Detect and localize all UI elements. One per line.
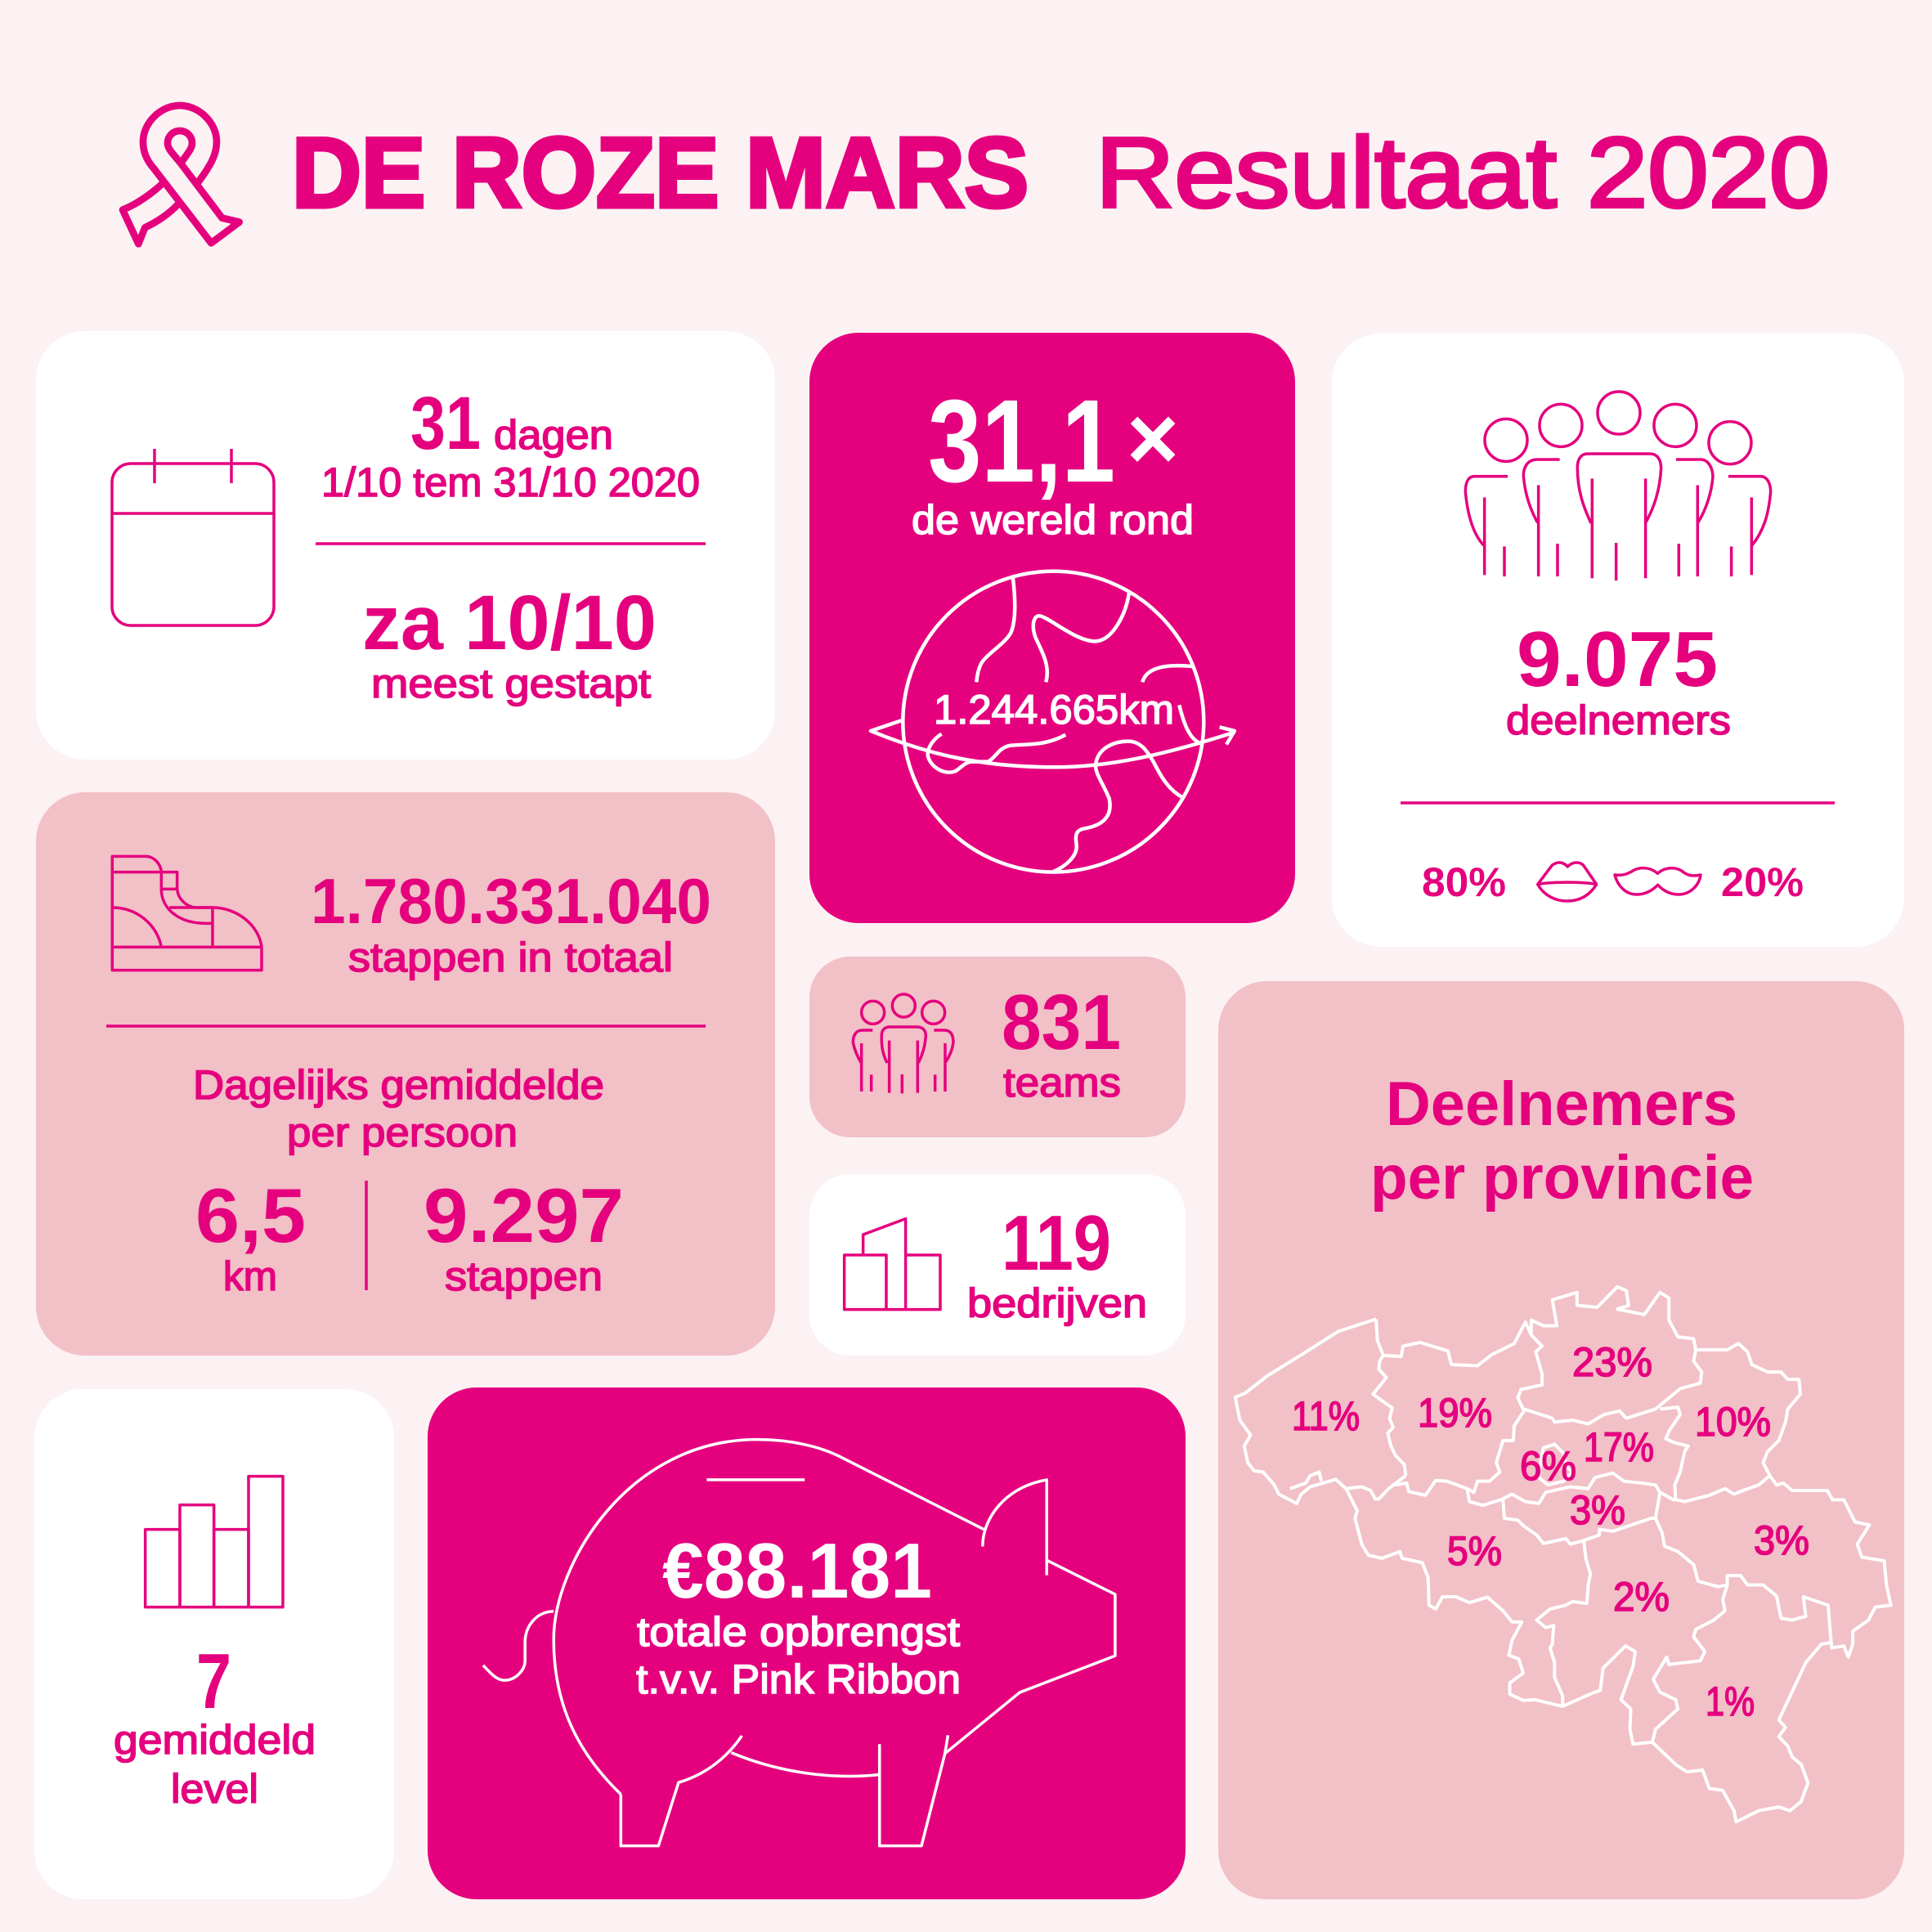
icon: people [1465, 392, 1771, 580]
text: caption: totale opbrengst [637, 1609, 960, 1655]
panel: provincies [1218, 981, 1904, 1899]
panel: wereld rond [809, 333, 1295, 923]
map labels: 5% [1447, 1528, 1502, 1574]
panel: deelnemers [1332, 334, 1904, 947]
panel: bedrijven [809, 1174, 1186, 1356]
panel: opbrengst: t.v.v. Pink Ribbon [636, 1656, 961, 1702]
heading: per provincie [1370, 1143, 1754, 1213]
text: amount: €88.181 [662, 1527, 932, 1615]
map labels: 3% [1570, 1487, 1625, 1533]
panel: stappen: stappen [445, 1253, 603, 1299]
text: daily average heading: Dagelijks gemiddelde [193, 1062, 604, 1108]
text: period: 1/10 tem 31/10 2020 [321, 459, 700, 505]
heading [1370, 1069, 1754, 1213]
map labels: 10% [1695, 1399, 1771, 1445]
panel: bedrijven: bedrijven [967, 1280, 1147, 1326]
map labels: 17% [1584, 1424, 1654, 1470]
map labels: 3% [1754, 1517, 1809, 1563]
text: deelnemers: deelnemers [1506, 697, 1731, 743]
icon: globe [871, 572, 1235, 872]
map labels: 1% [1706, 1679, 1755, 1724]
title: DE ROZE MARS [292, 117, 1029, 228]
map labels: 11% [1292, 1393, 1360, 1439]
panel: level: gemiddeld [114, 1717, 316, 1763]
icon: bar chart [146, 1477, 283, 1607]
text: 31,1x: 31,1 [928, 375, 1115, 507]
panel: stappen: per persoon [287, 1109, 518, 1155]
text: km: 1.244.665km [934, 687, 1174, 733]
text: meest gestapt: meest gestapt [371, 661, 651, 706]
text: 6,5 km: 6,5 [195, 1172, 306, 1258]
icon: team [853, 994, 953, 1093]
text: 31 dagen: 31 [410, 382, 481, 465]
text: de wereld rond: de wereld rond [912, 497, 1194, 543]
panel: dagen [36, 331, 775, 760]
icon: piggy bank [483, 1440, 1115, 1846]
map: Belgium [1235, 1287, 1891, 1822]
text: 9.075: 9.075 [1517, 616, 1718, 703]
text: 80%: 80% [1422, 859, 1506, 905]
icon: shoe [112, 856, 262, 970]
map labels: 23% [1572, 1339, 1652, 1385]
text: 9.297 stappen: 9.297 [424, 1172, 624, 1258]
text: stappen in totaal: stappen in totaal [348, 935, 673, 980]
map labels: 6% [1520, 1443, 1576, 1489]
icon: calendar [112, 449, 274, 625]
panel: level [34, 1389, 394, 1899]
panel: teams: teams [1003, 1060, 1121, 1105]
icon: lips and moustache [1538, 863, 1701, 901]
map labels: 19% [1418, 1390, 1492, 1436]
icon: buildings [845, 1219, 940, 1310]
panel: opbrengst [428, 1387, 1186, 1899]
heading: Deelnemers [1386, 1069, 1737, 1139]
panel: stappen [36, 792, 775, 1356]
text: 831 teams: 831 [1002, 979, 1121, 1066]
text: za 10/10: za 10/10 [362, 580, 657, 666]
map labels [1292, 1339, 1809, 1724]
subtitle: Resultaat 2020 [1096, 117, 1830, 228]
panel: dagen: dagen [494, 412, 613, 458]
panel: level: level [171, 1766, 258, 1812]
text: 7 gemiddeld level: 7 [196, 1638, 231, 1725]
text: 31,1x: × [1127, 388, 1179, 489]
panel: stappen: km [223, 1253, 277, 1299]
map labels: 2% [1613, 1574, 1670, 1620]
text: 119 bedrijven: 119 [1002, 1199, 1111, 1287]
panel: teams [809, 957, 1186, 1137]
text: 20%: 20% [1721, 859, 1804, 905]
header [123, 105, 1830, 244]
text: total steps: 1.780.331.040 [311, 865, 711, 937]
icon: pink ribbon [123, 105, 240, 244]
